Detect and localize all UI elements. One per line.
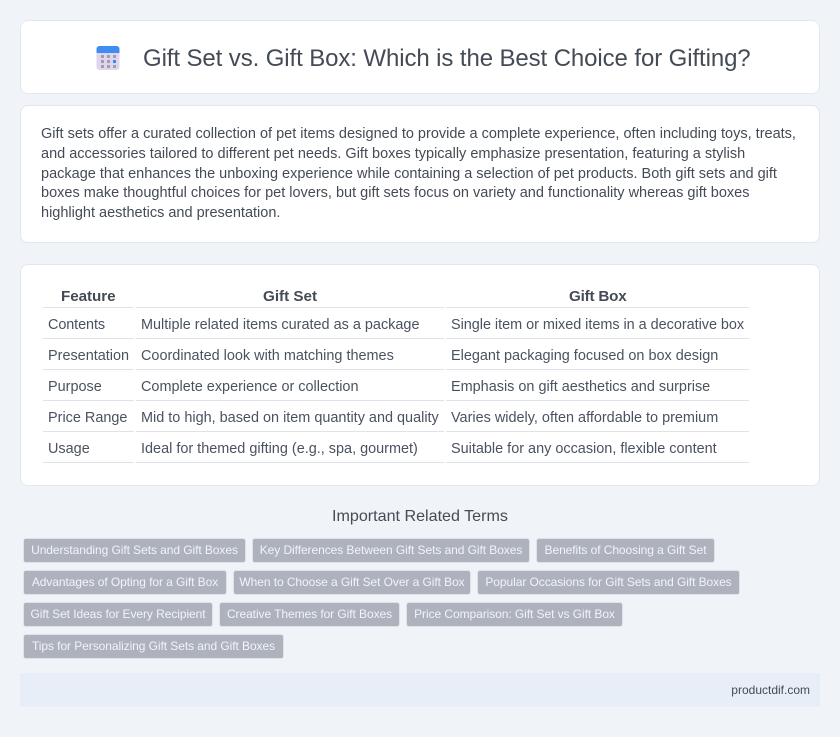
row: contents: Single item or mixed items in a decorative box	[451, 317, 744, 333]
row: price range	[48, 410, 718, 426]
related term tags: When to Choose a Gift Set Over a Gift Box	[239, 575, 465, 589]
row: usage	[48, 441, 717, 457]
related term tags: Key Differences Between Gift Sets and Gift Boxes	[260, 543, 522, 557]
related term tags: Popular Occasions for Gift Sets and Gift Boxes	[485, 575, 732, 589]
intro paragraph: package that enhances the unboxing experience while containing a selection of pet products. Both gift sets and gift	[41, 166, 777, 182]
related term tags: Creative Themes for Gift Boxes	[227, 607, 392, 621]
row: presentation: Presentation	[48, 348, 129, 364]
row: price range: Mid to high, based on item quantity and quality	[141, 410, 439, 426]
row: contents: Contents	[48, 317, 105, 333]
icon: calendar	[96, 46, 120, 70]
heading: related terms: Important Related Terms	[332, 507, 508, 525]
intro paragraph	[41, 126, 796, 221]
footer source text: productdif.com	[731, 683, 810, 697]
row: purpose: Complete experience or collection	[141, 379, 358, 395]
row: price range: Varies widely, often affordable to premium	[451, 410, 718, 426]
row: purpose: Purpose	[48, 379, 102, 395]
row: usage: Usage	[48, 441, 90, 457]
related term tags: Benefits of Choosing a Gift Set	[545, 543, 706, 557]
intro paragraph: and accessories tailored to different pet needs. Gift boxes typically emphasize presentation, featuring a stylish	[41, 146, 745, 162]
panel: header	[20, 20, 820, 94]
row: usage: Suitable for any occasion, flexible content	[451, 441, 717, 457]
row: presentation	[48, 348, 718, 364]
panel: intro text	[20, 105, 820, 243]
title: Gift Set vs. Gift Box: Which is the Best Choice for Gifting?	[143, 45, 751, 72]
row: usage: Ideal for themed gifting (e.g., spa, gourmet)	[141, 441, 418, 457]
intro paragraph: boxes make thoughtful choices for pet lovers, but gift sets focus on variety and functionality whereas gift boxes	[41, 185, 749, 201]
footer bar	[20, 673, 820, 707]
related term tags: Advantages of Opting for a Gift Box	[32, 575, 218, 589]
related term tags: Gift Set Ideas for Every Recipient	[30, 607, 206, 621]
related term tags: Understanding Gift Sets and Gift Boxes	[31, 543, 238, 557]
table header row	[61, 288, 626, 305]
row: purpose	[48, 379, 710, 395]
intro paragraph: Gift sets offer a curated collection of pet items designed to provide a complete experience, often including toys, treats,	[41, 126, 796, 142]
related term tags: Price Comparison: Gift Set vs Gift Box	[414, 607, 615, 621]
row: purpose: Emphasis on gift aesthetics and surprise	[451, 379, 710, 395]
row: contents	[48, 317, 744, 333]
row: presentation: Coordinated look with matching themes	[141, 348, 394, 364]
related term tags: Tips for Personalizing Gift Sets and Gift Boxes	[32, 639, 275, 653]
intro paragraph: highlight aesthetics and presentation.	[41, 205, 280, 221]
table header row: Gift Set	[263, 288, 317, 305]
comparison table	[43, 288, 749, 463]
panel: comparison table	[20, 264, 820, 486]
row: contents: Multiple related items curated as a package	[141, 317, 419, 333]
related term tags	[23, 538, 740, 659]
table header row: Feature	[61, 288, 116, 305]
row: price range: Price Range	[48, 410, 127, 426]
table header row: Gift Box	[569, 288, 626, 305]
row: presentation: Elegant packaging focused on box design	[451, 348, 718, 364]
